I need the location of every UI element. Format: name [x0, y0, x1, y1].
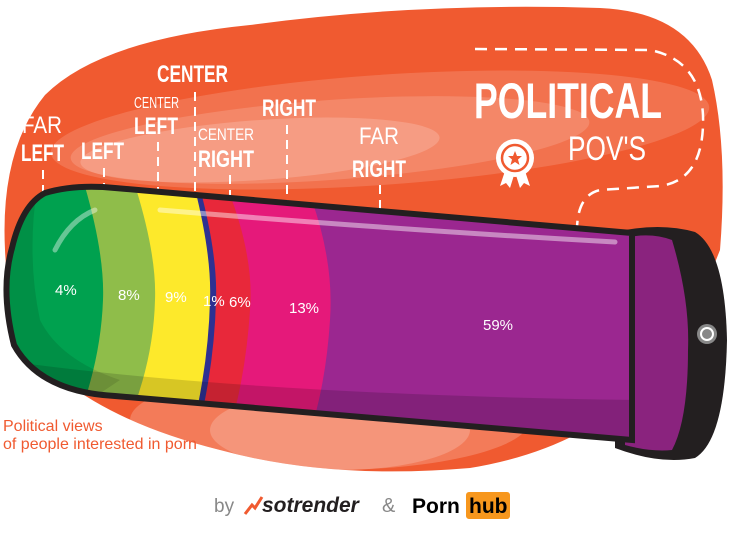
footer logos: sotrender: [262, 494, 361, 517]
category labels: [21, 61, 406, 183]
percentages: [55, 282, 513, 334]
footer logos: hub: [469, 495, 507, 518]
footer logos: &: [382, 495, 396, 517]
category labels: CENTER: [134, 95, 179, 112]
percentages: 4%: [55, 282, 77, 299]
tube chart: [3, 184, 635, 444]
title: POLITICAL: [474, 73, 662, 129]
dashed outline: [475, 49, 703, 228]
subtitle: Political views: [3, 418, 103, 435]
category labels: LEFT: [21, 140, 64, 167]
end cap: [615, 227, 727, 460]
category labels: CENTER: [157, 61, 228, 88]
category labels: RIGHT: [262, 95, 316, 122]
category labels: RIGHT: [198, 146, 254, 173]
percentages: 1%: [203, 293, 225, 310]
category labels: LEFT: [81, 138, 124, 165]
percentages: 13%: [289, 300, 319, 317]
footer logos: Porn: [412, 495, 460, 518]
title: POV'S: [568, 130, 646, 168]
category labels: CENTER: [198, 125, 254, 144]
title: [474, 73, 662, 168]
percentages: 8%: [118, 287, 140, 304]
percentages: 9%: [165, 289, 187, 306]
percentages: 59%: [483, 317, 513, 334]
percentages: 6%: [229, 294, 251, 311]
category labels: RIGHT: [352, 156, 406, 183]
dashed leader lines: [43, 92, 380, 245]
footer logos: by: [214, 496, 235, 517]
category labels: FAR: [359, 123, 399, 150]
category labels: LEFT: [134, 113, 178, 140]
icon: rosette: [496, 139, 534, 188]
subtitle: of people interested in porn: [3, 436, 197, 453]
category labels: FAR: [22, 112, 62, 139]
footer logos: [214, 492, 510, 519]
